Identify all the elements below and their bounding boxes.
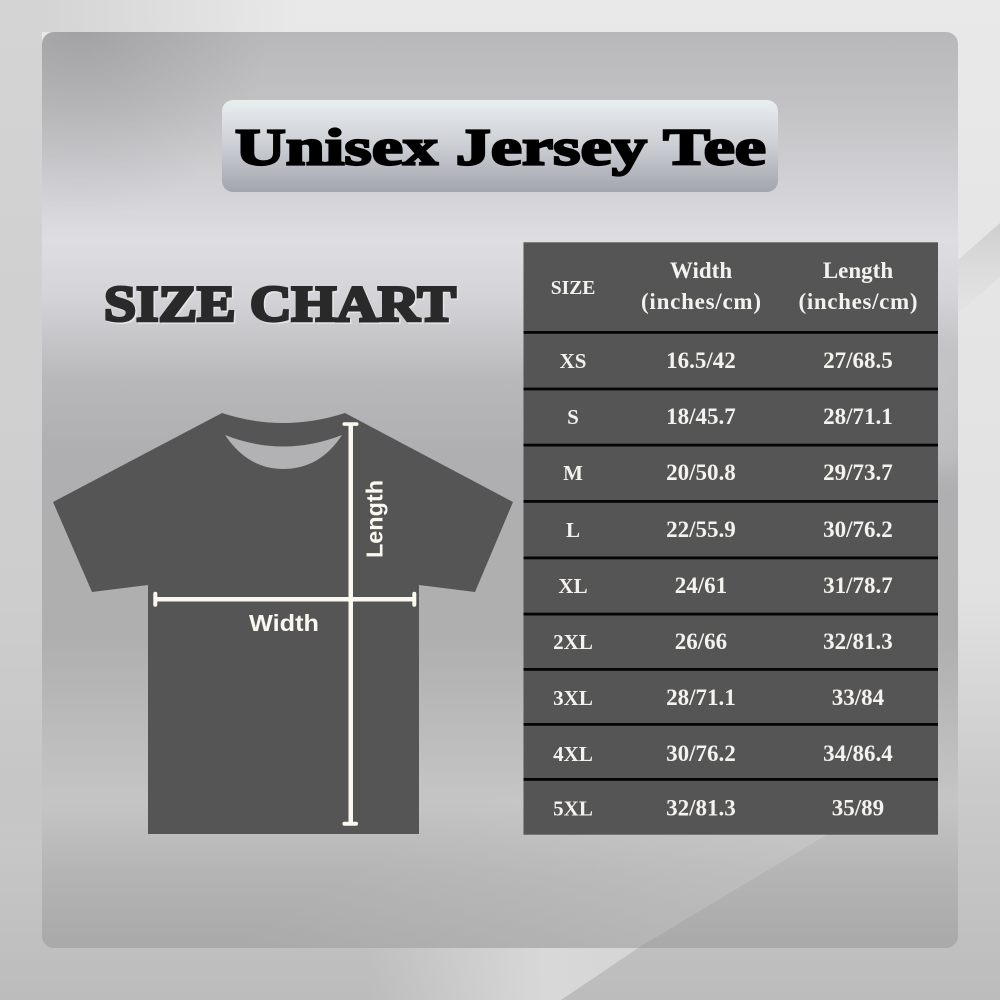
length measure arrow [342,422,358,826]
row XL: XL [558,574,588,598]
row M: 29/73.7 [823,460,893,485]
row 4XL: 4XL [553,742,593,766]
row 5XL: 35/89 [832,796,884,820]
width label: Width [249,610,319,636]
width measure arrow [153,592,416,607]
row L: L [566,518,580,542]
row XL: 31/78.7 [823,573,893,598]
row S: 18/45.7 [666,404,736,429]
row L: 30/76.2 [823,517,893,542]
row M [563,460,893,485]
table header: (inches/cm) [798,289,918,314]
t-shirt diagram [53,413,513,834]
row dividers [524,331,938,781]
table header: SIZE [551,278,595,299]
table header: Length [823,258,893,283]
row XS: 16.5/42 [666,348,736,373]
t-shirt body [53,413,513,834]
neck opening [225,435,342,469]
size table [524,242,938,835]
row 5XL: 5XL [553,796,593,820]
row M: 20/50.8 [666,460,736,485]
row XS [560,348,893,373]
table header [551,258,918,314]
size chart heading: SIZE CHART [106,278,458,334]
table header: (inches/cm) [641,289,761,314]
row 3XL [553,685,885,710]
table background [524,242,938,835]
row S: S [567,405,579,429]
row S [567,404,893,429]
size chart heading: SIZE CHART [104,277,456,333]
row XL [558,573,893,598]
row 3XL: 3XL [553,686,593,710]
row L: 22/55.9 [666,517,736,542]
row 4XL: 34/86.4 [823,741,893,766]
row M: M [563,461,583,485]
table header: Width [670,258,732,283]
row 4XL: 30/76.2 [666,741,736,766]
row 5XL [553,796,884,820]
row 2XL [553,629,893,654]
row XL: 24/61 [675,573,727,598]
row XS: 27/68.5 [823,348,893,373]
row L [566,517,893,542]
row 5XL: 32/81.3 [666,796,736,820]
row 2XL: 2XL [553,630,593,654]
row 2XL: 32/81.3 [823,629,893,654]
row XS: XS [560,349,586,373]
row S: 28/71.1 [823,404,893,429]
title text: Unisex Jersey Tee [235,120,766,176]
row 2XL: 26/66 [675,629,727,654]
row 4XL [553,741,893,766]
length label: Length [362,480,388,558]
title banner [222,100,778,192]
row 3XL: 28/71.1 [666,685,736,710]
row 3XL: 33/84 [832,685,885,710]
